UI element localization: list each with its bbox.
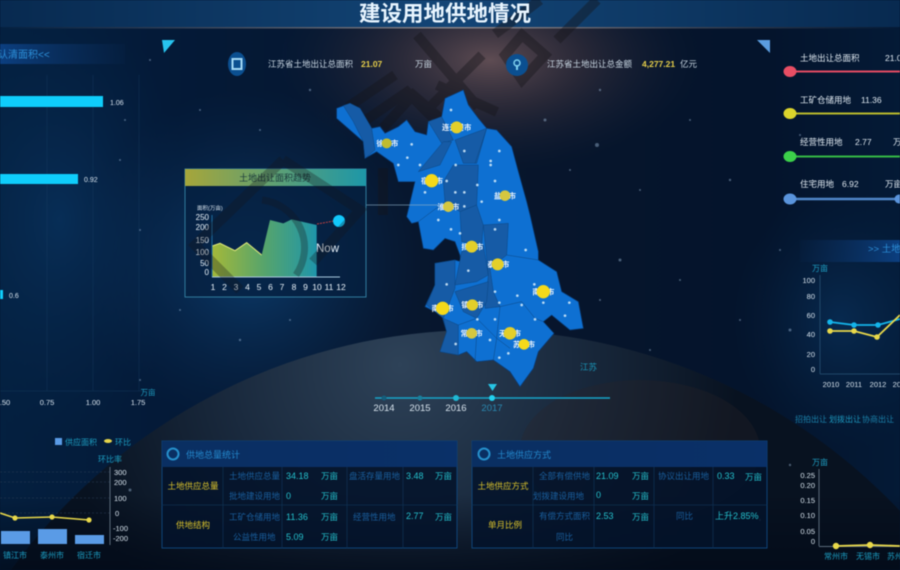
table heading <box>472 441 767 467</box>
years <box>373 403 503 414</box>
category labels: 常州市 <box>824 551 848 561</box>
values: 2.77 <box>406 511 424 521</box>
category labels: 无锡市 <box>856 551 880 561</box>
yellow line <box>833 542 900 549</box>
x axis labels: 1 <box>211 282 216 292</box>
values: 5.09 <box>286 532 304 542</box>
bars <box>1 529 104 544</box>
x axis labels <box>211 282 346 292</box>
legend: 环比率 <box>98 454 122 464</box>
row labels: 单月比例 <box>488 520 522 530</box>
area chart <box>212 219 317 277</box>
x axis labels: 5 <box>257 282 262 292</box>
icon: total amount <box>506 54 528 76</box>
row labels: 土地供应总量 <box>167 481 219 491</box>
values: 2.53 <box>596 511 614 521</box>
y axis labels <box>800 471 815 546</box>
y axis labels: 100 <box>802 276 815 285</box>
line <box>0 513 92 523</box>
years: 2016 <box>445 403 467 414</box>
category labels <box>3 550 101 560</box>
x axis labels: 4 <box>245 282 250 292</box>
units: 万亩 <box>321 491 338 501</box>
pin: commercial: 2.77 <box>855 137 872 147</box>
y axis labels: 0.05 <box>800 527 815 536</box>
x axis labels: 2010 <box>823 380 839 389</box>
left bottom chart <box>0 437 131 560</box>
pin: industrial: 工矿仓储用地 <box>800 95 852 105</box>
x axis labels: 3 <box>234 282 239 292</box>
row labels: 供地结构 <box>176 520 210 530</box>
values <box>596 471 759 521</box>
axis labels: -200 <box>113 534 128 543</box>
unit: 万亩 <box>812 457 828 467</box>
table: supply method: 全部有偿供地 <box>539 471 591 481</box>
x axis labels: 7 <box>280 282 285 292</box>
x axis labels: 2012 <box>870 380 886 389</box>
y axis labels: 0 <box>811 365 815 374</box>
heading band <box>0 44 125 64</box>
table: supply statistics: 盘活存量用地 <box>349 471 401 481</box>
table: supply method: 协议出让用地 <box>658 471 710 481</box>
summary: total amount <box>506 54 698 76</box>
y axis labels: 0.20 <box>800 481 815 490</box>
city markers: 南京市 <box>432 304 454 313</box>
pin: total: 土地出让总面积 <box>800 53 860 63</box>
y axis labels: 100 <box>196 248 210 257</box>
marker arrow <box>488 384 497 391</box>
yellow line <box>827 315 900 340</box>
years: 2014 <box>373 403 395 414</box>
map region label: 江苏 <box>580 362 598 372</box>
pin: total <box>784 53 900 77</box>
row labels <box>477 481 529 530</box>
chart heading band <box>800 240 900 262</box>
city markers: 连云港市 <box>442 123 472 132</box>
y axis labels: 20 <box>807 350 815 359</box>
units <box>632 471 762 522</box>
unit: total amount: 亿元 <box>680 59 698 69</box>
category labels <box>824 551 900 561</box>
city markers: 苏州市 <box>513 340 536 349</box>
axis labels: 300 <box>114 468 127 477</box>
axis labels: 0 <box>115 509 119 518</box>
values: 0 <box>596 490 601 500</box>
x axis labels: 9 <box>303 282 308 292</box>
axis labels <box>113 468 128 543</box>
planet <box>0 330 900 570</box>
x axis labels: 万亩 <box>140 387 156 397</box>
x axis labels: .50 <box>0 398 10 407</box>
table: supply method <box>472 441 767 548</box>
blue line <box>827 319 900 328</box>
values: 上升2.85% <box>715 511 759 521</box>
left panel: horizontal bar chart <box>0 44 156 407</box>
x axis labels: 8 <box>292 282 297 292</box>
table heading: 供地总量统计 <box>186 449 240 460</box>
watermark <box>348 0 597 215</box>
units: 万亩 <box>321 532 338 542</box>
table: supply method: 同比 <box>556 532 573 542</box>
table: supply statistics: 批地建设用地 <box>229 491 281 501</box>
popup: land trend chart <box>185 169 366 297</box>
right line chart <box>795 240 900 424</box>
label: total area: 江苏省土地出让总面积 <box>268 59 354 69</box>
legend <box>55 437 131 464</box>
x axis labels: 6 <box>268 282 273 292</box>
x axis labels <box>0 387 156 407</box>
x axis labels: 1.75 <box>131 398 145 407</box>
legend: 环比 <box>115 437 131 447</box>
value: total amount: 4,277.21 <box>642 59 675 69</box>
x axis labels: 11 <box>325 282 334 292</box>
city markers: 徐州市 <box>376 139 399 148</box>
years: 2015 <box>409 403 431 414</box>
units: 万亩 <box>435 471 452 481</box>
pin: industrial: 11.36 <box>861 95 882 105</box>
category labels: 泰州市 <box>40 550 64 560</box>
city markers: 镇江市 <box>461 301 484 310</box>
years: 2017 <box>481 403 503 414</box>
pin: residential: 住宅用地 <box>800 179 835 189</box>
table: supply statistics: 经营性用地 <box>353 512 396 522</box>
bar 3: 0.6 <box>9 293 19 300</box>
chart heading band: >> 土地 <box>868 243 900 255</box>
y axis labels: 0.25 <box>800 471 815 480</box>
y axis labels: 0.15 <box>800 496 815 505</box>
stars <box>119 59 801 521</box>
pin: commercial: 经营性用地 <box>800 137 843 147</box>
legend: 供应面积 <box>65 437 97 447</box>
table: supply method: 划拨建设用地 <box>533 491 585 501</box>
title: 建设用地供地情况 <box>359 2 531 26</box>
city markers: 淮安市 <box>437 202 460 211</box>
right panel: land use pins <box>784 53 900 204</box>
values: 0.33 <box>717 471 735 481</box>
row labels: 土地供应方式 <box>477 481 529 491</box>
y axis labels: 60 <box>807 311 815 320</box>
popup heading: 土地出让面积趋势 <box>239 172 311 183</box>
x axis labels: 10 <box>312 282 322 292</box>
units: 万亩 <box>745 472 762 482</box>
category labels: 镇江市 <box>3 550 27 560</box>
city markers: 常州市 <box>461 329 483 338</box>
y axis labels: 0 <box>811 537 815 546</box>
x axis labels: 0.75 <box>40 398 54 407</box>
summary: total area <box>228 52 432 76</box>
city markers: 扬州市 <box>461 242 484 251</box>
y axis labels: 200 <box>196 223 210 232</box>
value: total area: 21.07 <box>361 59 383 69</box>
y axis labels: 0 <box>205 268 210 277</box>
bar 2 <box>0 174 98 184</box>
units <box>321 471 452 542</box>
units: 万亩 <box>632 471 649 481</box>
table heading: 土地供应方式 <box>497 449 551 460</box>
city markers: 无锡市 <box>499 329 522 338</box>
units: 万亩 <box>632 491 649 501</box>
now marker <box>316 215 345 255</box>
timeline <box>373 384 610 414</box>
x axis labels <box>823 380 900 389</box>
popup heading <box>185 169 366 186</box>
bar 2: 0.92 <box>84 177 98 184</box>
units: 万亩 <box>321 471 338 481</box>
legend: 招拍出让 <box>795 414 827 424</box>
legend: 划拨出让 <box>829 414 861 424</box>
y axis labels: 40 <box>807 330 815 339</box>
bar 1 <box>0 96 124 107</box>
pin: residential <box>784 179 900 204</box>
values <box>286 471 424 542</box>
values: 34.18 <box>286 471 309 481</box>
pin: residential: 6.92 <box>842 179 859 189</box>
legend <box>795 414 894 424</box>
values: 21.09 <box>596 471 619 481</box>
city markers: 泰州市 <box>487 260 510 269</box>
table: supply method: 有偿方式面积 <box>539 511 591 521</box>
x axis labels: 1.00 <box>86 398 100 407</box>
pin: industrial <box>784 95 900 119</box>
legend: 协商出让 <box>862 414 894 424</box>
table: supply statistics <box>162 441 457 548</box>
y axis labels: 250 <box>196 213 210 222</box>
axis labels: 200 <box>114 478 127 487</box>
y axis labels <box>196 213 210 277</box>
units: 万亩 <box>321 512 338 522</box>
table heading <box>162 441 457 467</box>
row labels <box>167 481 219 530</box>
label: total amount: 江苏省土地出让总金额 <box>547 59 633 69</box>
city markers <box>376 121 555 350</box>
table: supply statistics: 土地供应总量 <box>229 471 281 481</box>
units: 万亩 <box>435 512 452 522</box>
city markers: 南通市 <box>532 287 555 296</box>
unit label: 面积(万亩) <box>197 204 223 212</box>
right bottom chart <box>800 457 900 561</box>
popup watermark <box>195 160 360 290</box>
city markers: 宿迁市 <box>421 176 444 185</box>
values: 11.36 <box>286 512 308 522</box>
values: 3.48 <box>406 471 424 481</box>
city markers: 盐城市 <box>494 191 517 200</box>
table: supply statistics: 工矿仓储用地 <box>229 512 281 522</box>
bar 1: 1.06 <box>110 100 124 107</box>
map dots <box>397 109 571 359</box>
unit: total area: 万亩 <box>415 59 432 69</box>
units: 万亩 <box>632 512 649 522</box>
corner markers <box>162 40 770 53</box>
pin: commercial <box>784 137 900 162</box>
y axis labels: 50 <box>200 259 210 268</box>
y axis labels: 0.10 <box>800 511 815 520</box>
y axis labels: 80 <box>807 292 815 301</box>
unit: 万亩 <box>812 263 828 273</box>
now marker: Now <box>316 243 340 255</box>
y axis labels <box>802 276 815 374</box>
map of Jiangsu <box>337 90 583 387</box>
x axis labels: 2 <box>222 282 227 292</box>
header bar <box>0 0 900 28</box>
x axis labels: 2011 <box>846 380 862 389</box>
bar 3 <box>0 290 19 300</box>
table: supply statistics: 公益性用地 <box>233 532 276 542</box>
axis labels: 100 <box>114 494 127 503</box>
x axis labels: 12 <box>336 282 346 292</box>
axis labels: -100 <box>113 524 128 533</box>
values: 0 <box>286 491 291 501</box>
table: supply method: 同比 <box>676 511 693 521</box>
y axis labels: 150 <box>196 236 210 245</box>
connector line <box>366 204 438 206</box>
icon: total area <box>228 52 246 76</box>
category labels: 宿迁市 <box>77 550 101 560</box>
